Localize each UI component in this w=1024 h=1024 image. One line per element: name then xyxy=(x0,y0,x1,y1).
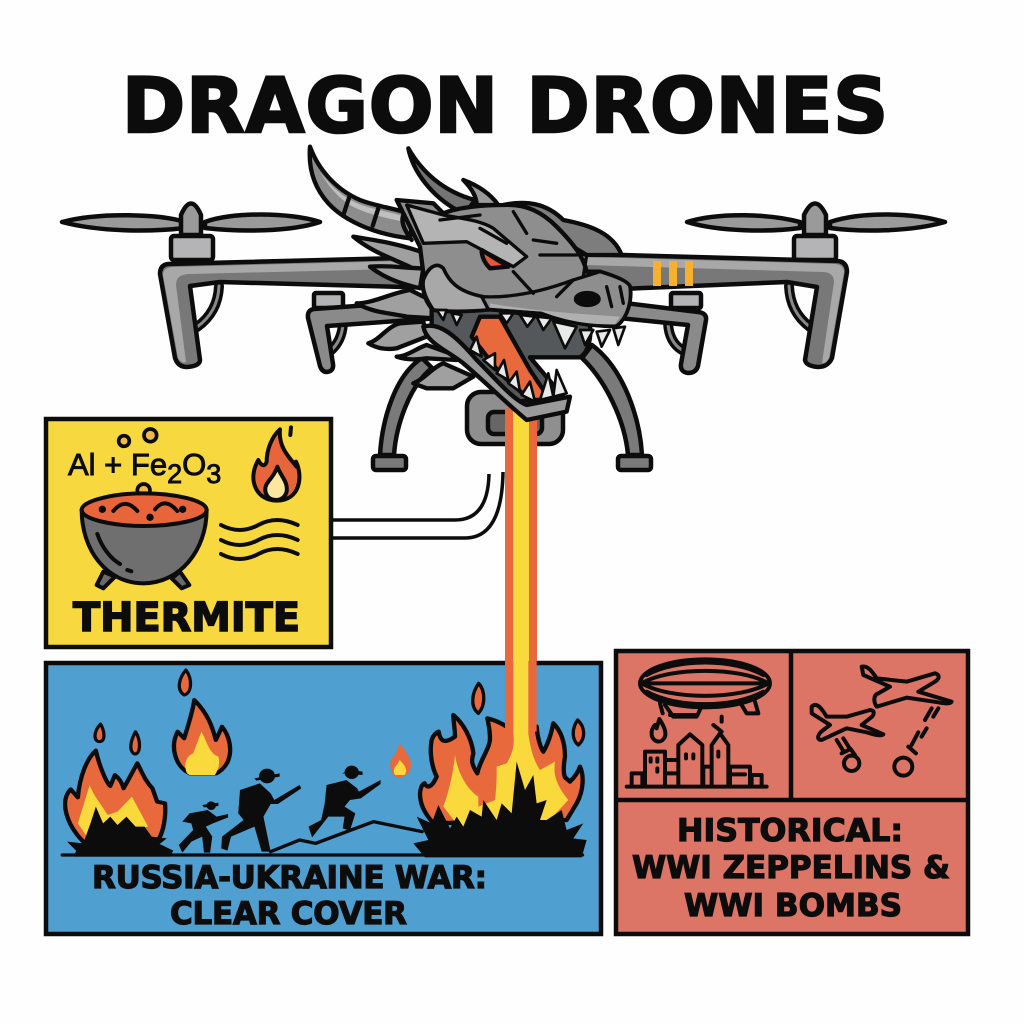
icon: soldier middle xyxy=(221,769,301,852)
icon: right fire xyxy=(413,660,587,857)
motor mounts xyxy=(171,236,836,308)
chemical formula: Al + Fe xyxy=(68,447,167,482)
historical artwork xyxy=(627,659,952,787)
scene: battlefield xyxy=(62,670,582,857)
caption: russia-ukraine war: RUSSIA-UKRAINE WAR: xyxy=(92,860,487,896)
icon: soldier right xyxy=(308,766,381,837)
rotor right xyxy=(687,204,945,235)
main arm right with leg xyxy=(550,253,847,367)
beam base xyxy=(505,660,537,732)
icon: bombs xyxy=(842,747,916,776)
inner arm right xyxy=(560,295,706,373)
panel: thermite xyxy=(46,419,331,647)
ground line xyxy=(62,822,582,855)
crest back xyxy=(503,203,622,255)
lower teeth xyxy=(470,337,567,402)
snout shade xyxy=(490,303,620,324)
yellow core xyxy=(443,660,568,837)
caption: clear cover: CLEAR COVER xyxy=(170,896,407,932)
thermite artwork xyxy=(82,427,299,588)
beam over camera xyxy=(505,408,537,478)
icon: floating flame xyxy=(174,700,230,775)
struts behind arms xyxy=(197,286,810,352)
horn right xyxy=(408,148,475,212)
cheek xyxy=(423,265,488,311)
nostril xyxy=(576,293,599,305)
upper teeth xyxy=(437,310,625,348)
icon: droplets xyxy=(95,670,191,754)
horn left xyxy=(310,147,413,240)
head scale lines xyxy=(440,212,623,307)
main arm left with leg xyxy=(160,257,440,367)
mouth interior xyxy=(432,307,590,402)
icon: zeppelin xyxy=(640,659,770,717)
snout xyxy=(482,272,630,326)
droplets xyxy=(473,683,584,745)
forehead plate xyxy=(407,205,527,267)
chemical formula: 2 xyxy=(167,459,182,489)
icon: bubbles xyxy=(119,429,157,497)
neck frills xyxy=(353,237,473,388)
inner arm left xyxy=(308,300,440,372)
beam of fire xyxy=(505,415,537,661)
icon: soldier small xyxy=(179,801,228,853)
horn spike xyxy=(463,180,498,205)
icon: cauldron xyxy=(82,493,207,588)
landing legs xyxy=(373,345,651,470)
caption: historical: HISTORICAL: xyxy=(677,813,903,849)
caption: zeppelins: WWI ZEPPELINS & xyxy=(632,850,950,886)
label: thermite: THERMITE xyxy=(73,595,300,641)
fire outline xyxy=(420,715,583,823)
icon: heat waves xyxy=(221,520,298,559)
warning stripes xyxy=(657,261,689,286)
panel: russia-ukraine war xyxy=(46,660,601,934)
title: DRAGON DRONES xyxy=(122,61,888,150)
icon: left fire xyxy=(65,751,173,857)
upper head xyxy=(397,200,630,326)
drone xyxy=(62,147,945,478)
chemical formula: O xyxy=(182,447,206,482)
icon: city under attack xyxy=(627,717,767,787)
dragon head xyxy=(310,147,630,420)
chemical formula: 3 xyxy=(206,459,221,489)
caption: bombs: WWI BOMBS xyxy=(684,888,902,924)
panel: historical xyxy=(616,651,968,934)
icon: biplanes xyxy=(812,666,952,751)
camera gimbal xyxy=(467,392,563,444)
tongue xyxy=(472,317,550,400)
eye xyxy=(482,250,508,268)
icon: small flame xyxy=(390,743,411,777)
lower jaw xyxy=(423,326,570,420)
scorched bush xyxy=(413,762,587,857)
rotor left xyxy=(62,204,320,235)
connector lines from thermite panel to drone xyxy=(332,472,503,538)
icon: flame xyxy=(253,427,299,501)
